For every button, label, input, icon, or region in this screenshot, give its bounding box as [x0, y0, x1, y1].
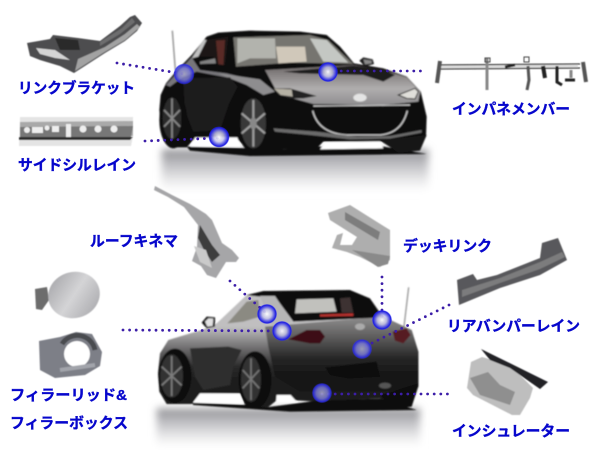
roof and rear window area — [247, 290, 383, 322]
label: rear bumper reinforcement: リアバンパーレイン — [447, 318, 580, 335]
label: deck link: デッキリンク — [403, 237, 492, 255]
part: deck link — [328, 205, 390, 267]
body — [158, 290, 418, 408]
front car photo — [159, 31, 428, 191]
headlights — [273, 88, 317, 98]
white between wheels — [191, 137, 241, 147]
marker: side sill — [208, 126, 230, 148]
grille — [313, 110, 407, 132]
rear wheel — [159, 92, 187, 148]
rear car photo — [157, 287, 420, 447]
front wheel — [238, 93, 272, 154]
label: filler box: フィラーボックス — [10, 415, 128, 432]
white under car — [193, 393, 243, 403]
part: rear bumper reinforcement — [457, 238, 567, 305]
part: filler lid — [35, 266, 105, 324]
marker: insulator — [312, 383, 332, 403]
rear badge — [355, 323, 365, 330]
part: instrument panel member — [437, 57, 586, 90]
label: side sill reinforcement: サイドシルレイン — [18, 157, 136, 174]
body side — [190, 347, 242, 390]
ground shadow — [192, 399, 417, 412]
part: filler box — [39, 332, 102, 378]
part: side sill reinforcement — [19, 117, 133, 146]
part: link bracket — [27, 15, 142, 73]
marker: rear bumper — [352, 339, 372, 359]
marker: link bracket — [174, 64, 194, 84]
part: roof kinematics — [154, 186, 239, 278]
front-right wheel — [382, 135, 427, 153]
antenna — [172, 31, 175, 70]
side window — [200, 37, 228, 65]
badge — [353, 94, 367, 102]
dotted leader lines — [117, 63, 449, 394]
marker: filler — [272, 321, 292, 341]
label: instrument panel member: インパネメンバー — [452, 101, 570, 118]
exhaust — [379, 383, 391, 389]
hood — [265, 65, 420, 105]
mirror — [202, 317, 215, 328]
marker: roof kinematics — [257, 304, 277, 324]
windshield — [233, 35, 353, 67]
body — [159, 31, 427, 153]
mirror right — [359, 57, 374, 67]
reflection — [157, 408, 420, 447]
reflection — [162, 149, 428, 191]
label: roof kinematics: ルーフキネマ — [90, 233, 178, 250]
label: filler lid: フィラーリッド& — [10, 388, 127, 404]
door — [183, 77, 237, 132]
rear fascia — [265, 317, 418, 392]
antenna — [404, 287, 409, 327]
label: link bracket: リンクブラケット — [18, 79, 135, 97]
side window — [227, 300, 260, 323]
marker: deck link — [372, 310, 392, 330]
wheels — [158, 349, 192, 403]
shoulder highlight — [166, 57, 267, 92]
licence recess — [325, 362, 380, 378]
marker: instrument member — [318, 62, 338, 82]
part: insulator — [467, 349, 548, 415]
tail lights — [288, 330, 325, 343]
ground shadow — [187, 146, 427, 156]
label: insulator: インシュレーター — [452, 423, 570, 440]
mirror left — [197, 57, 218, 70]
